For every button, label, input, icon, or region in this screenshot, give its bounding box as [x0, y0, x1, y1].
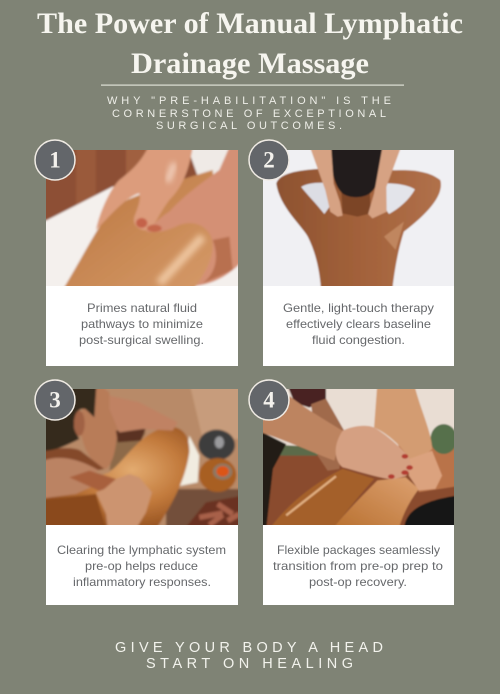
photo: hands massaging leg — [46, 150, 238, 286]
panel: card 4 — [249, 380, 462, 605]
caption: transition from pre-op prep to — [273, 559, 443, 573]
panel: card 2 — [249, 140, 462, 366]
subtitle: SURGICAL OUTCOMES. — [156, 120, 342, 132]
number badge 4 — [249, 380, 289, 420]
photo: foot and calf massage — [263, 389, 454, 525]
number badge 3: 3 — [49, 388, 61, 412]
caption: pre-op helps reduce — [85, 559, 198, 573]
number badge 4: 4 — [263, 388, 275, 412]
caption — [273, 543, 443, 589]
subtitle: WHY "PRE-HABILITATION" IS THE — [107, 95, 391, 107]
photo: back massage — [263, 150, 454, 286]
caption: Primes natural fluid — [87, 301, 197, 315]
title — [37, 8, 463, 80]
footer call to action — [115, 640, 383, 672]
caption — [57, 543, 226, 589]
number badge 1: 1 — [49, 148, 61, 172]
caption: post-op recovery. — [309, 575, 407, 589]
caption: effectively clears baseline — [286, 317, 431, 331]
caption: Clearing the lymphatic system — [57, 543, 226, 557]
number badge 2 — [249, 140, 289, 180]
number badge 1 — [35, 140, 75, 180]
title: Drainage Massage — [131, 48, 369, 80]
title: The Power of Manual Lymphatic — [37, 8, 463, 40]
number badge 2: 2 — [263, 148, 275, 172]
caption: fluid congestion. — [312, 333, 405, 347]
panel: card 3 — [35, 380, 246, 605]
panel: card 1 — [35, 140, 246, 366]
caption: post-surgical swelling. — [79, 333, 204, 347]
subtitle — [107, 95, 391, 132]
number badge 3 — [35, 380, 75, 420]
caption: inflammatory responses. — [73, 575, 211, 589]
caption — [283, 301, 434, 347]
photo: shoulder massage with hot stones — [46, 389, 238, 525]
subtitle: CORNERSTONE OF EXCEPTIONAL — [112, 108, 386, 120]
caption: Flexible packages seamlessly — [277, 543, 440, 557]
caption: Gentle, light-touch therapy — [283, 301, 434, 315]
footer call to action: START ON HEALING — [146, 656, 353, 672]
caption — [79, 301, 204, 347]
caption: pathways to minimize — [81, 317, 203, 331]
footer call to action: GIVE YOUR BODY A HEAD — [115, 640, 383, 656]
